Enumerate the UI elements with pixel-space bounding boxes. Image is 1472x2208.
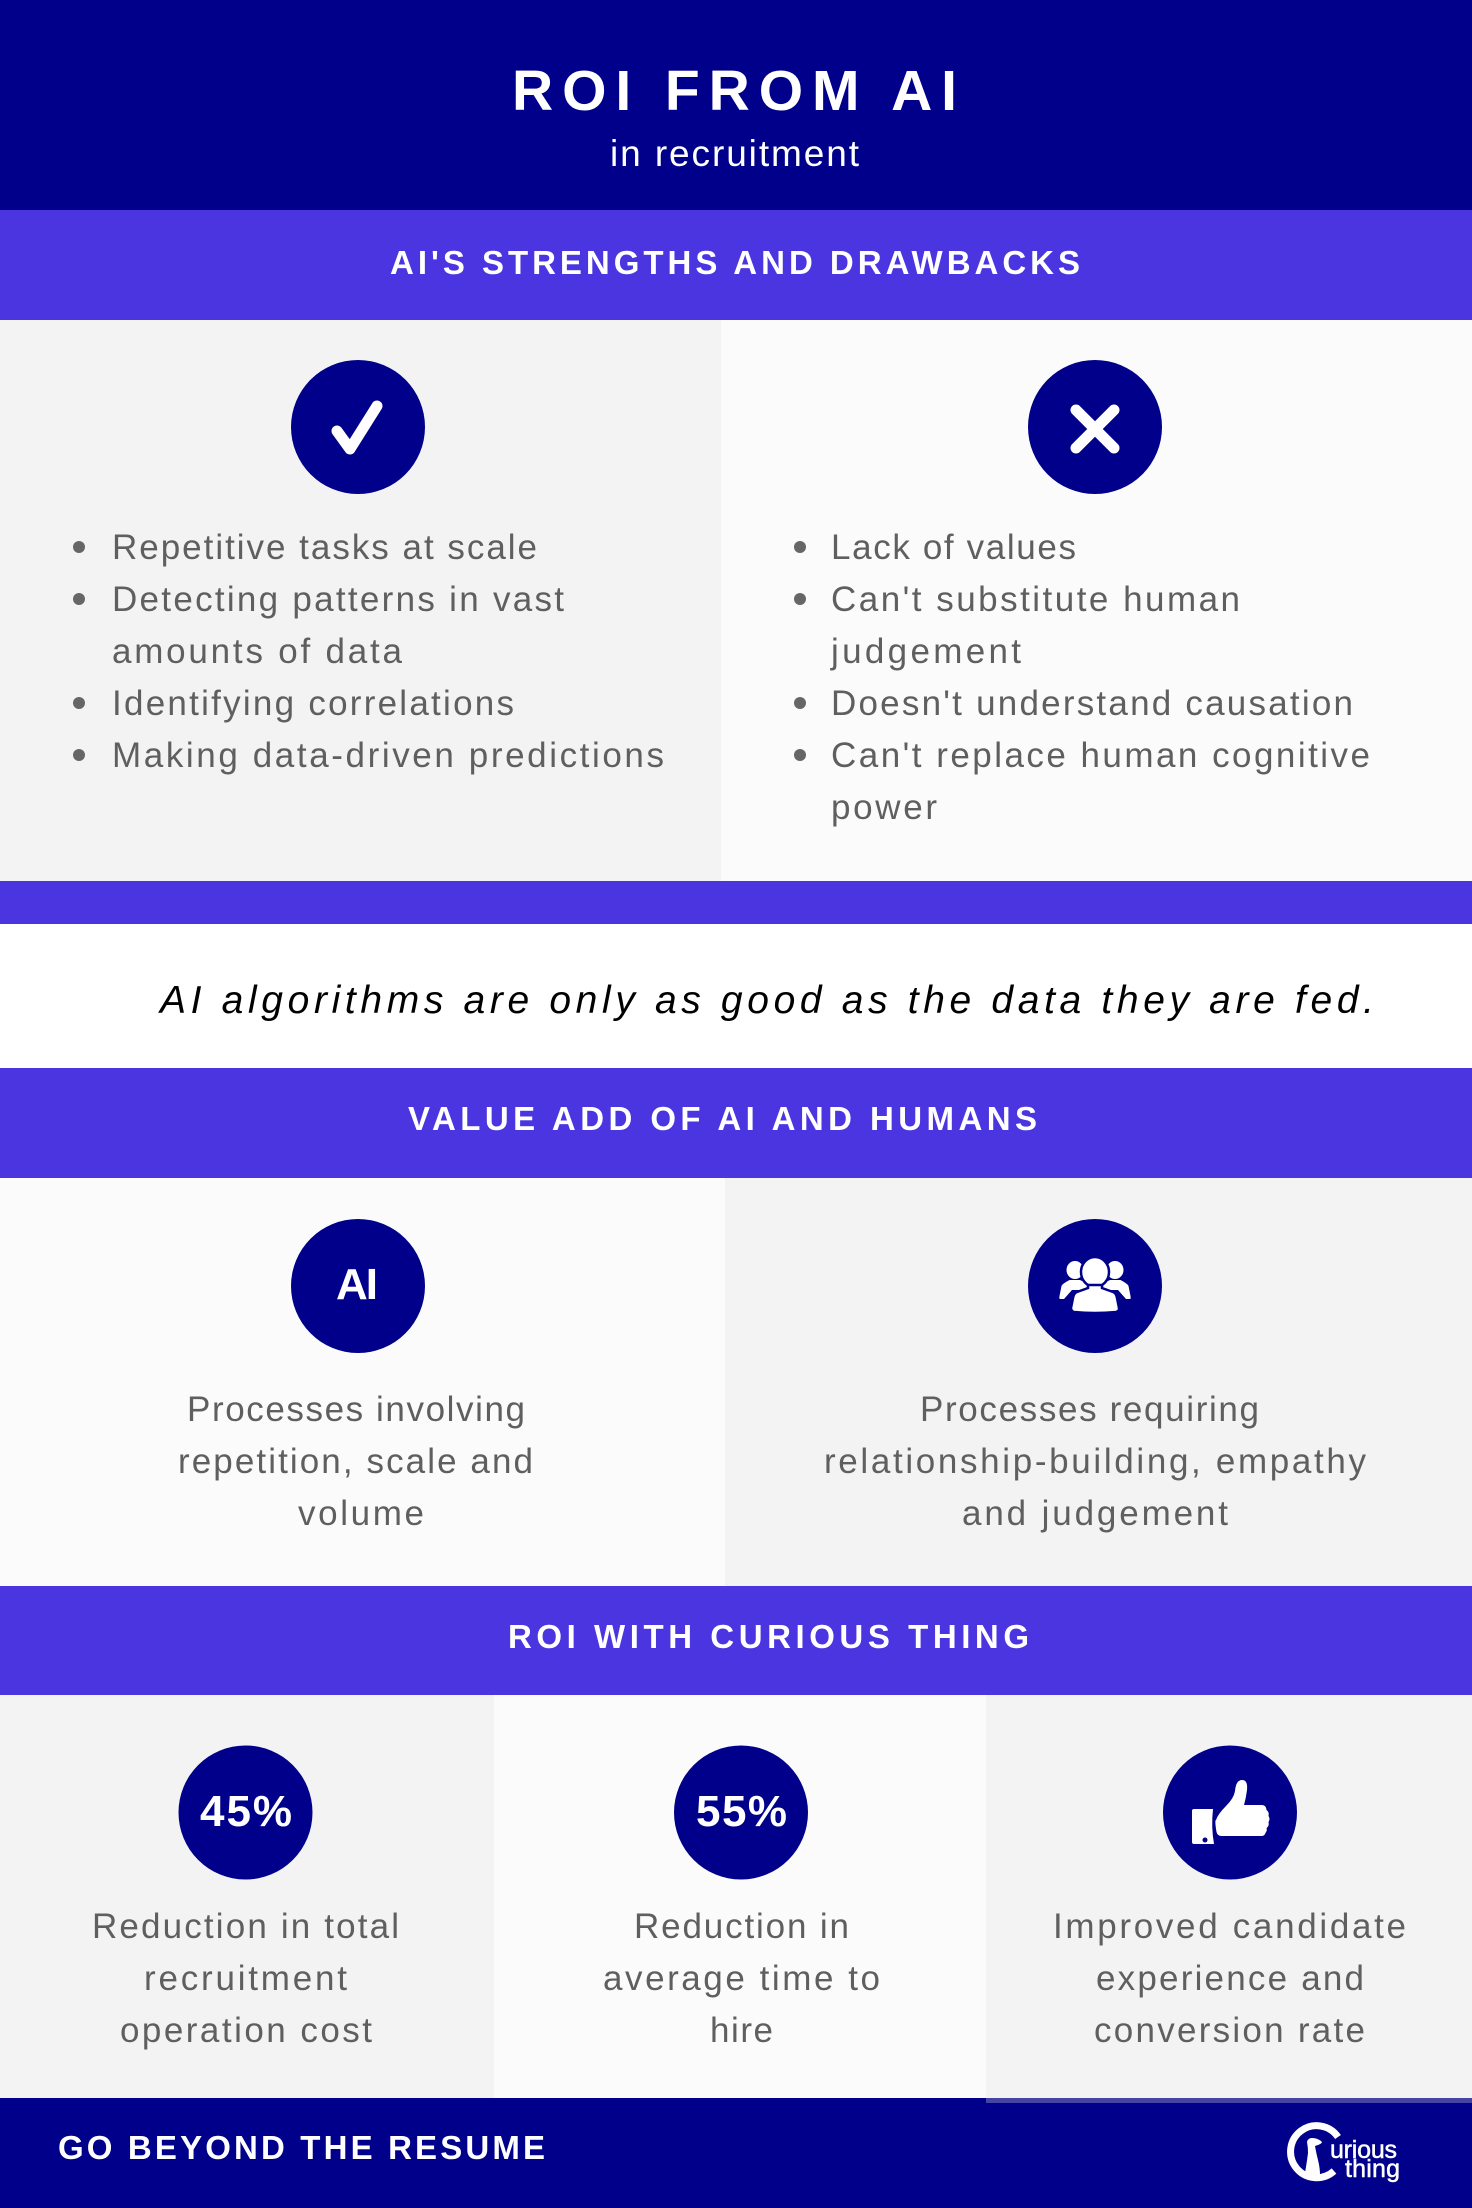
panel: time reduction	[494, 1695, 986, 2098]
drawbacks list: Can't substitute human	[831, 580, 1240, 619]
strengths list: Detecting patterns in vast	[112, 580, 564, 619]
cost reduction text	[92, 1907, 399, 2050]
logo: Curious Thing: urious	[1330, 2136, 1397, 2164]
icon: 55%	[674, 1746, 808, 1880]
section heading: strengths and drawbacks	[0, 210, 1472, 320]
AI value text: Processes involving	[187, 1390, 525, 1429]
title: ROI FROM AI	[512, 59, 957, 123]
time reduction text: hire	[710, 2011, 773, 2050]
section heading: ROI with Curious Thing: ROI WITH CURIOUS THING	[508, 1618, 1029, 1655]
icon: AI	[291, 1219, 425, 1353]
quote	[0, 924, 1472, 1068]
drawbacks list: Doesn't understand causation	[831, 684, 1353, 723]
time reduction text: Reduction in	[634, 1907, 849, 1946]
panel: AI value	[0, 1178, 725, 1586]
panel: candidate experience	[986, 1695, 1472, 2098]
strengths list: Making data-driven predictions	[112, 736, 664, 775]
drawbacks list: Lack of values	[831, 528, 1076, 567]
panel: cost reduction	[0, 1695, 494, 2098]
icon: check mark	[291, 360, 425, 494]
section heading: value add: VALUE ADD OF AI AND HUMANS	[408, 1100, 1037, 1137]
subtitle: in recruitment	[610, 133, 860, 174]
time reduction text: average time to	[603, 1959, 880, 1998]
icon: 45%	[178, 1746, 312, 1880]
logo: Curious Thing	[1291, 2126, 1400, 2183]
human value text	[824, 1390, 1366, 1533]
divider band	[0, 881, 1472, 924]
cost reduction text: recruitment	[144, 1959, 347, 1998]
quote: AI algorithms are only as good as the data they are fed.	[158, 979, 1374, 1022]
time reduction text	[603, 1907, 880, 2050]
candidate experience text: Improved candidate	[1053, 1907, 1406, 1946]
logo: Curious Thing: thing	[1345, 2155, 1400, 2183]
strengths list: amounts of data	[112, 632, 403, 671]
header banner	[0, 0, 1472, 210]
drawbacks list	[794, 528, 1370, 827]
footer tagline: GO BEYOND THE RESUME	[58, 2129, 545, 2166]
icon: people	[1028, 1219, 1162, 1353]
candidate experience text: experience and	[1096, 1959, 1364, 1998]
panel: drawbacks	[721, 320, 1472, 881]
section heading: value add	[0, 1068, 1472, 1178]
human value text: relationship-building, empathy	[824, 1442, 1366, 1481]
panel: strengths	[0, 320, 721, 881]
AI value text: repetition, scale and	[178, 1442, 533, 1481]
footer	[0, 2098, 1472, 2208]
AI value text	[178, 1390, 533, 1533]
cost reduction text: operation cost	[120, 2011, 372, 2050]
strengths list: Identifying correlations	[112, 684, 514, 723]
candidate experience text: conversion rate	[1094, 2011, 1365, 2050]
drawbacks list: Can't replace human cognitive	[831, 736, 1370, 775]
icon: cross	[1028, 360, 1162, 494]
icon: 55%: 55%	[696, 1787, 787, 1836]
icon: thumbs up	[1163, 1746, 1297, 1880]
drawbacks list: judgement	[830, 632, 1021, 671]
human value text: Processes requiring	[920, 1390, 1259, 1429]
drawbacks list: power	[831, 788, 937, 827]
section heading: strengths and drawbacks: AI'S STRENGTHS AND DRAWBACKS	[390, 244, 1080, 281]
AI value text: volume	[298, 1494, 424, 1533]
human value text: and judgement	[962, 1494, 1228, 1533]
section heading: ROI with Curious Thing	[0, 1586, 1472, 1695]
cost reduction text: Reduction in total	[92, 1907, 399, 1946]
candidate experience text	[1053, 1907, 1406, 2050]
panel: human value	[725, 1178, 1472, 1586]
strengths list	[73, 528, 664, 775]
icon: AI: AI	[336, 1260, 378, 1309]
strengths list: Repetitive tasks at scale	[112, 528, 537, 567]
icon: 45%: 45%	[200, 1787, 292, 1836]
